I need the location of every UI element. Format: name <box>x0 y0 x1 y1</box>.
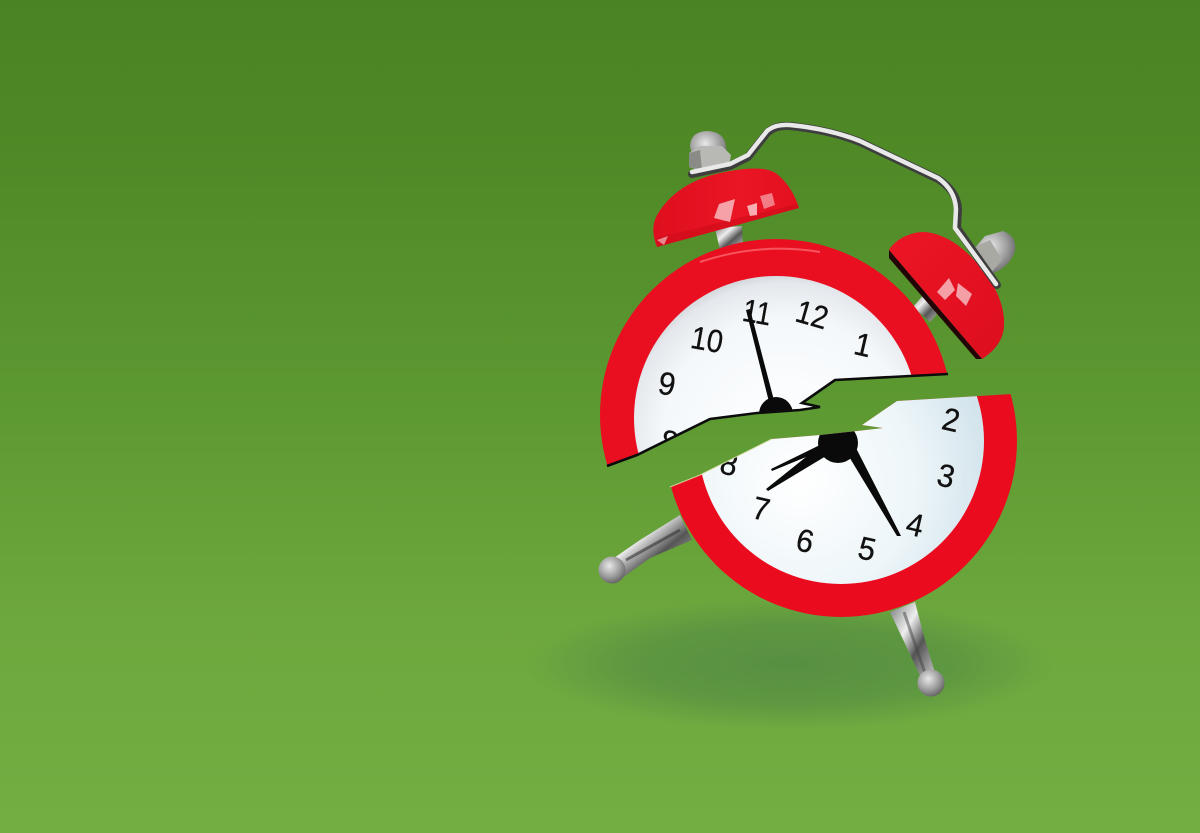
lower half of clock <box>671 394 1017 617</box>
upper minute hand <box>746 309 774 399</box>
right foot <box>890 602 944 696</box>
left bell <box>653 168 799 247</box>
upper numerals: 12 <box>792 293 832 337</box>
upper numerals: 9 <box>656 365 678 403</box>
lower clock face <box>702 396 984 584</box>
upper numerals: 1 <box>851 326 875 364</box>
hour hand to 7 <box>766 451 824 491</box>
left foot <box>598 515 692 584</box>
floor shadow <box>525 598 1055 730</box>
upper ring highlight <box>700 249 820 262</box>
upper numerals: 8 <box>656 423 682 461</box>
lower numerals: 3 <box>934 457 958 495</box>
lower numerals: 4 <box>903 506 927 544</box>
lower crack rim highlight <box>670 439 772 487</box>
minute hand to 4 <box>845 448 901 536</box>
upper hub <box>759 397 792 412</box>
right bell <box>889 232 1004 359</box>
upper half of clock <box>600 239 947 464</box>
right bell stem <box>913 292 942 322</box>
hour hand tail <box>771 446 818 471</box>
left nut <box>689 131 731 171</box>
upper numerals: 10 <box>688 320 726 360</box>
lower numerals <box>720 408 960 560</box>
lower numerals: 2 <box>939 401 963 439</box>
upper numerals <box>659 300 868 440</box>
lower numerals: 6 <box>793 522 817 560</box>
right nut <box>973 231 1015 275</box>
lower numerals: 8 <box>717 445 741 483</box>
left bell stem <box>715 226 743 250</box>
lower hub <box>818 431 858 463</box>
handle <box>692 125 997 285</box>
upper red ring <box>600 239 947 464</box>
lower red ring <box>671 394 1017 617</box>
lower numerals: 7 <box>749 490 773 528</box>
upper crack edge <box>607 374 948 466</box>
lower numerals: 5 <box>855 530 879 568</box>
upper clock face <box>634 276 912 453</box>
upper numerals: 11 <box>740 293 774 333</box>
